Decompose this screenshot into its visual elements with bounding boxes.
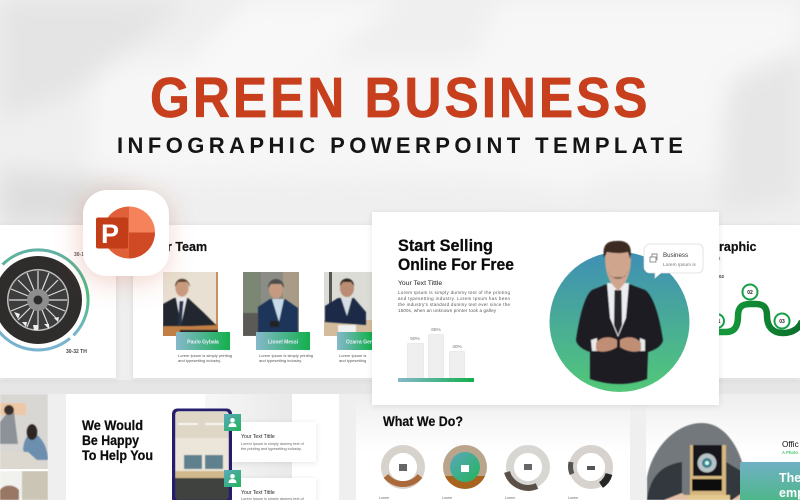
label: small caption: t: [719, 256, 721, 261]
panel: photography slide: [646, 422, 800, 500]
body text: Lorem Ipsum is simply dummy text of the printing: [398, 290, 510, 295]
card: text block one: Your Text Tittle: [241, 434, 275, 440]
icon: PowerPoint app tile: [83, 190, 169, 276]
label: upper tire size: 30-1: [74, 252, 84, 258]
caption: green subtitle: A Photo: [782, 450, 798, 455]
captions for service rings: [379, 496, 578, 500]
heading: we would be happy: Be Happy: [82, 432, 139, 448]
icon: tire with progress ring: [0, 250, 88, 350]
subtitle: INFOGRAPHIC POWERPOINT TEMPLATE: [117, 133, 683, 158]
service ring 3: [507, 449, 546, 488]
heading: what we do: What We Do?: [383, 414, 463, 429]
device frame with office photo: [172, 408, 232, 500]
team member 3: Ozarra Gen: [346, 340, 373, 346]
service ring 4: [571, 449, 609, 485]
callout: business speech bubble: [644, 244, 703, 278]
team member 2: [243, 272, 313, 363]
card: text block one: the printing and typesetting industry.: [241, 447, 302, 451]
heading: start selling online: Start Selling: [398, 236, 493, 255]
bar: 50%: 50%: [410, 336, 421, 342]
team member 2: Lorem Ipsum is simply printing: [259, 353, 313, 358]
panel: bottom-left photo slide: [0, 394, 48, 500]
heading: we would be happy: We Would: [82, 417, 143, 433]
heading: we would be happy: [82, 417, 153, 463]
team member 3: [324, 272, 373, 363]
bar: 65%: 65%: [431, 327, 442, 333]
card: text block one: Lorem Ipsum is simply dummy text of: [241, 442, 305, 446]
photo: businessman in black suit: [576, 241, 663, 384]
service ring 1: [385, 449, 421, 485]
panel: tire slide: [0, 225, 116, 378]
team member 3: and typesetting: [339, 358, 366, 363]
bar: 40%: 40%: [452, 344, 463, 350]
banner: teal headline: [740, 462, 800, 500]
heading: start selling online: Online For Free: [398, 255, 514, 274]
body text: the industry's standard dummy text ever since the: [398, 302, 510, 307]
team member 1: Lorem Ipsum is simply printing: [178, 353, 232, 358]
heading: team: r Team: [167, 240, 207, 254]
body text: [398, 290, 510, 313]
label: lower tire size: 30-32 TH: [66, 349, 87, 355]
captions for service rings: Lorem: [379, 496, 389, 500]
team member 1: and typesetting industry.: [178, 358, 221, 363]
card: text block one: [224, 414, 316, 462]
step 03: 03: [779, 319, 785, 325]
heading: start selling online: [398, 236, 514, 274]
chart baseline: [398, 378, 474, 382]
service ring 2: [443, 445, 487, 489]
panel: help slide: [66, 394, 339, 500]
callout: business speech bubble: Lorem Ipsum is: [663, 262, 696, 268]
gradient circle: [550, 252, 690, 392]
heading: infographic: raphic: [719, 240, 757, 254]
team member 3: Lorem Ipsum is: [339, 353, 366, 358]
card: text block two: [224, 470, 316, 500]
card: text block two: Your Text Tittle: [241, 490, 275, 496]
body text: 1500s, when an unknown printer took a galley: [398, 308, 497, 313]
panel: main featured slide: [372, 212, 719, 405]
title: GREEN BUSINESS: [150, 67, 650, 130]
panel: roadmap infographic slide: [719, 225, 800, 380]
panel: what we do slide: [356, 394, 630, 500]
panel: team slide: [133, 225, 383, 378]
team member 2: and typesetting industry.: [259, 358, 302, 363]
captions for service rings: Lorem: [505, 496, 515, 500]
step 02: 02: [747, 290, 753, 296]
chart: winding green path with steps: [705, 284, 800, 333]
heading: office label: Offic: [782, 440, 799, 449]
label: step note: 02: [719, 274, 725, 279]
callout: business speech bubble: Business: [663, 252, 688, 259]
icon: hand: [650, 254, 657, 262]
photo: photographer with large-format camera: [646, 422, 743, 500]
text title: Your Text Tittle: [398, 280, 442, 287]
icon: PowerPoint logo: P: [101, 219, 119, 249]
team member 1: [163, 272, 232, 363]
captions for service rings: Lorem: [442, 496, 452, 500]
step 01: 1: [718, 319, 721, 325]
bar chart: [398, 327, 474, 382]
team member 1: Paulo Gybala: [187, 340, 219, 346]
heading: we would be happy: To Help You: [82, 447, 153, 463]
body text: and typesetting industry. Lorem Ipsum has been: [398, 296, 510, 301]
photo: office meeting: [0, 394, 48, 500]
team member 2: Lionel Messi: [268, 340, 299, 346]
captions for service rings: Lorem: [568, 496, 578, 500]
